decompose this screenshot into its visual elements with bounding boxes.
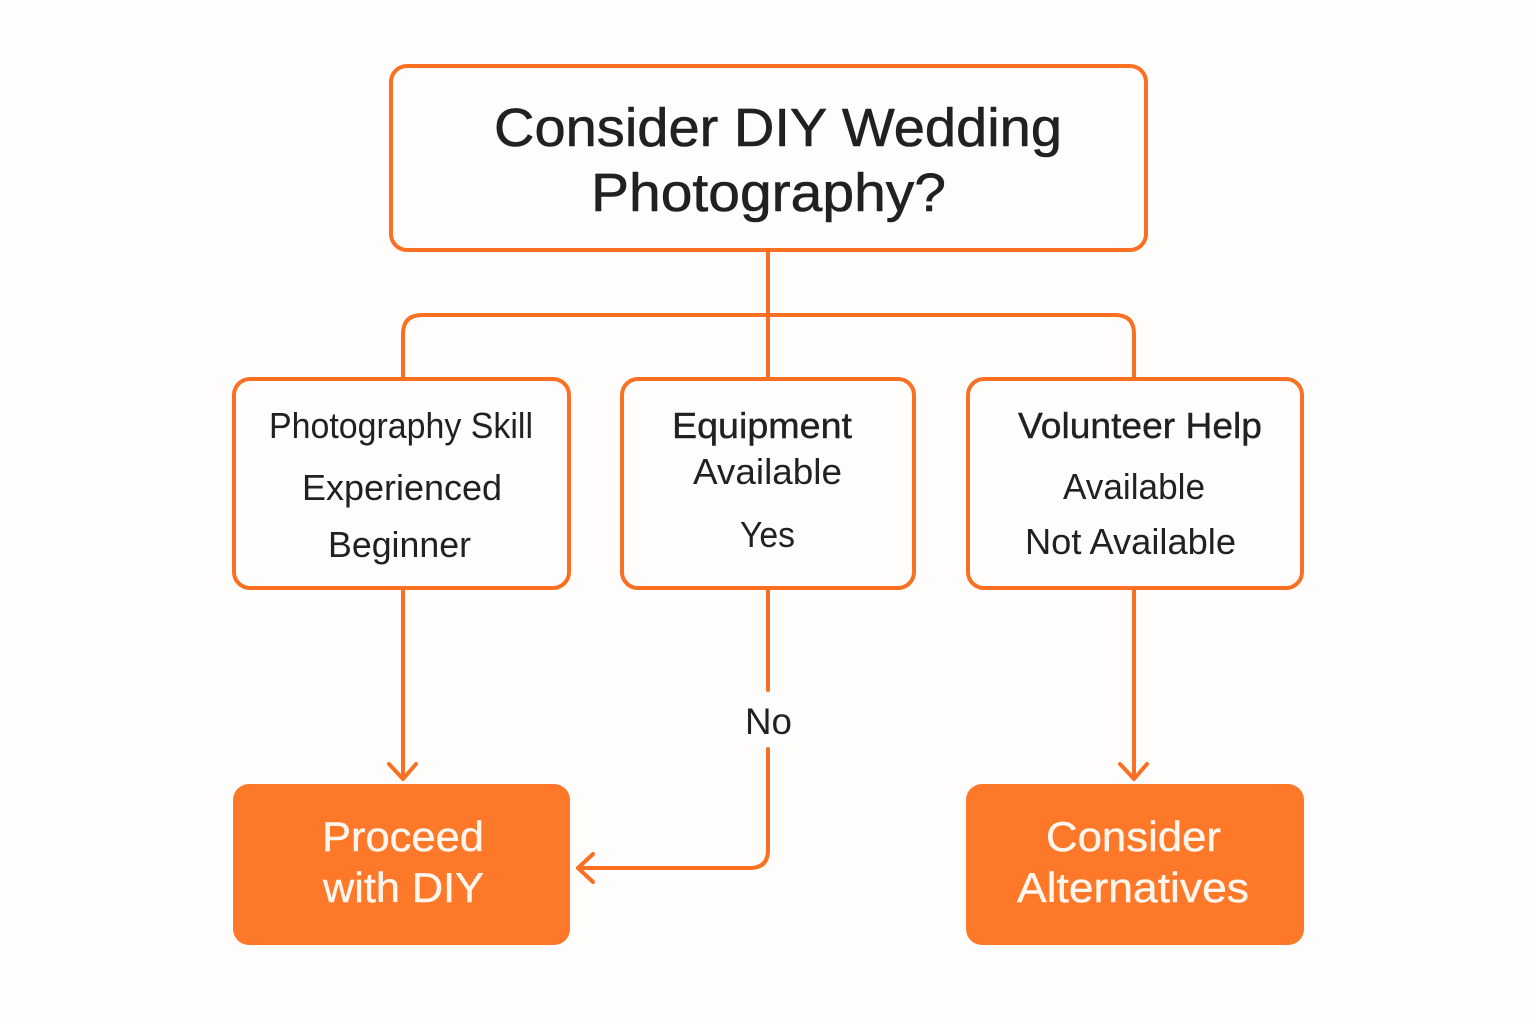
- heading: Photography?: [591, 163, 946, 223]
- volunteer options: Available: [1063, 466, 1205, 507]
- equipment options: Equipment: [672, 405, 852, 446]
- proceed label: with DIY: [322, 864, 484, 911]
- heading: Consider DIY Wedding: [494, 98, 1062, 158]
- connectors from question to the three criteria: [403, 250, 1134, 379]
- label: no: No: [745, 701, 792, 742]
- panel: photography skill: [234, 379, 569, 588]
- panel: consider alternatives: [966, 784, 1304, 945]
- alternatives label: Consider: [1046, 813, 1221, 860]
- equipment options: Available: [693, 451, 842, 492]
- volunteer options: Volunteer Help: [1018, 405, 1262, 446]
- photography skill options: Photography Skill: [269, 405, 533, 446]
- arrow: equipment no to proceed: [578, 588, 768, 882]
- panel: proceed with DIY: [233, 784, 570, 945]
- arrow: skill to proceed: [389, 588, 416, 779]
- panel: title question: [391, 66, 1146, 250]
- panel: volunteer help: [968, 379, 1302, 588]
- panel: equipment available: [622, 379, 914, 588]
- equipment options: Yes: [740, 514, 795, 555]
- alternatives label: Alternatives: [1017, 864, 1249, 911]
- volunteer options: Not Available: [1025, 521, 1236, 562]
- photography skill options: Experienced: [302, 467, 502, 508]
- arrow: volunteer to alternatives: [1120, 588, 1147, 779]
- proceed label: Proceed: [322, 813, 484, 860]
- photography skill options: Beginner: [328, 524, 471, 565]
